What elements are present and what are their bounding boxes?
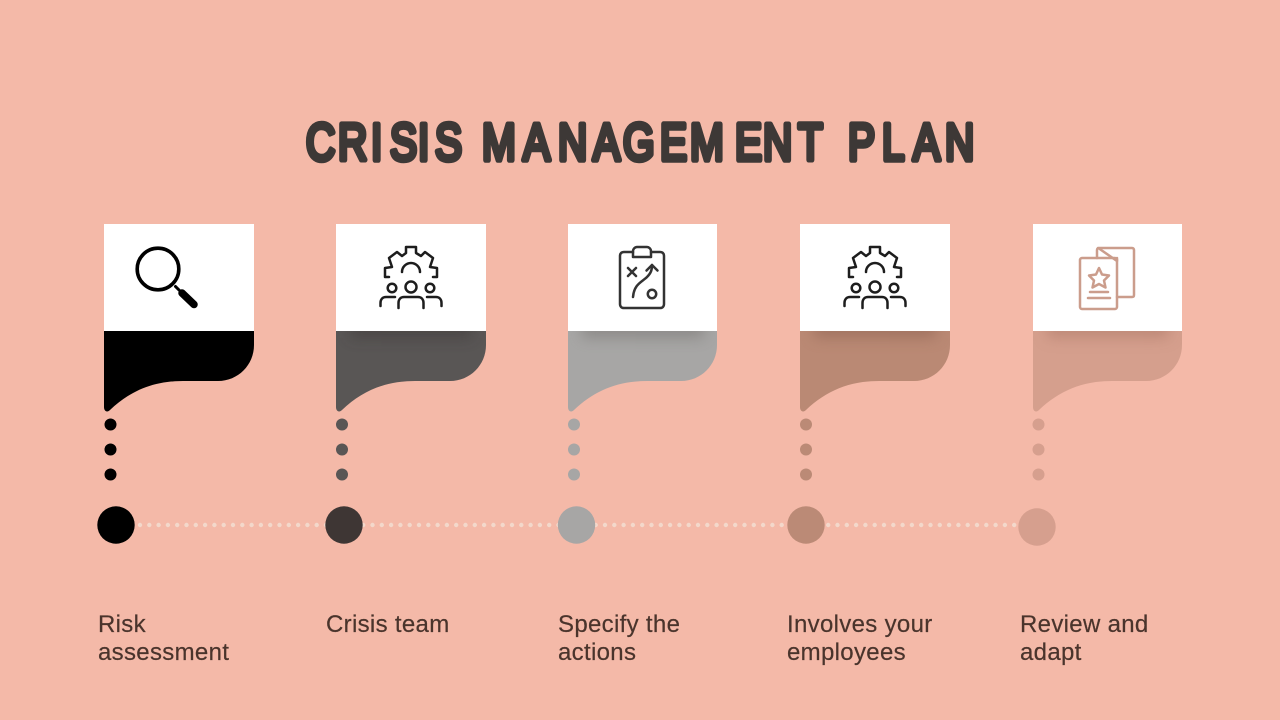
icon: magnifying glass (137, 248, 194, 304)
label: review and adapt: Review and (1020, 611, 1149, 638)
connector dots 2 (336, 418, 348, 480)
step 4: involves your employees (787, 224, 950, 666)
step 2: crisis team (325, 224, 486, 638)
flag card 3 (568, 331, 717, 411)
icon: team and gear (380, 247, 442, 308)
white panel 1 (104, 224, 254, 331)
label: specify the actions: Specify the (558, 611, 680, 638)
label: specify the actions: actions (558, 639, 636, 666)
label: involves your employees: Involves your (787, 611, 933, 638)
timeline node 1 (97, 506, 135, 544)
label: review and adapt: adapt (1020, 639, 1082, 666)
connector dots 1 (104, 418, 116, 480)
icon: review document (1080, 248, 1134, 309)
white panel 4 (800, 224, 950, 331)
step 1: risk assessment (97, 224, 254, 666)
label: risk assessment: Risk (98, 611, 147, 638)
step 5: review and adapt (1018, 224, 1182, 666)
label: risk assessment: assessment (98, 639, 229, 666)
flag card 4 (800, 331, 950, 411)
label: involves your employees: employees (787, 639, 906, 666)
flag card 2 (336, 331, 486, 411)
timeline node 5 (1018, 508, 1056, 546)
title: CRISIS MANAGEMENT PLAN (306, 113, 974, 171)
icon: clipboard plan (620, 247, 664, 308)
connector dots 3 (568, 418, 580, 480)
timeline node 2 (325, 506, 363, 544)
white panel 5 (1033, 224, 1182, 331)
connector dots 4 (800, 418, 812, 480)
white panel 3 (568, 224, 717, 331)
icon: team and gear (844, 247, 906, 308)
connector dots 5 (1032, 418, 1044, 480)
step 3: specify the actions (558, 224, 717, 666)
timeline node 3 (558, 506, 595, 544)
flag card 1 (104, 331, 254, 411)
timeline dotted connector (140, 523, 1020, 527)
timeline node 4 (787, 506, 825, 544)
white panel 2 (336, 224, 486, 331)
label: crisis team: Crisis team (326, 611, 450, 638)
flag card 5 (1033, 331, 1182, 411)
